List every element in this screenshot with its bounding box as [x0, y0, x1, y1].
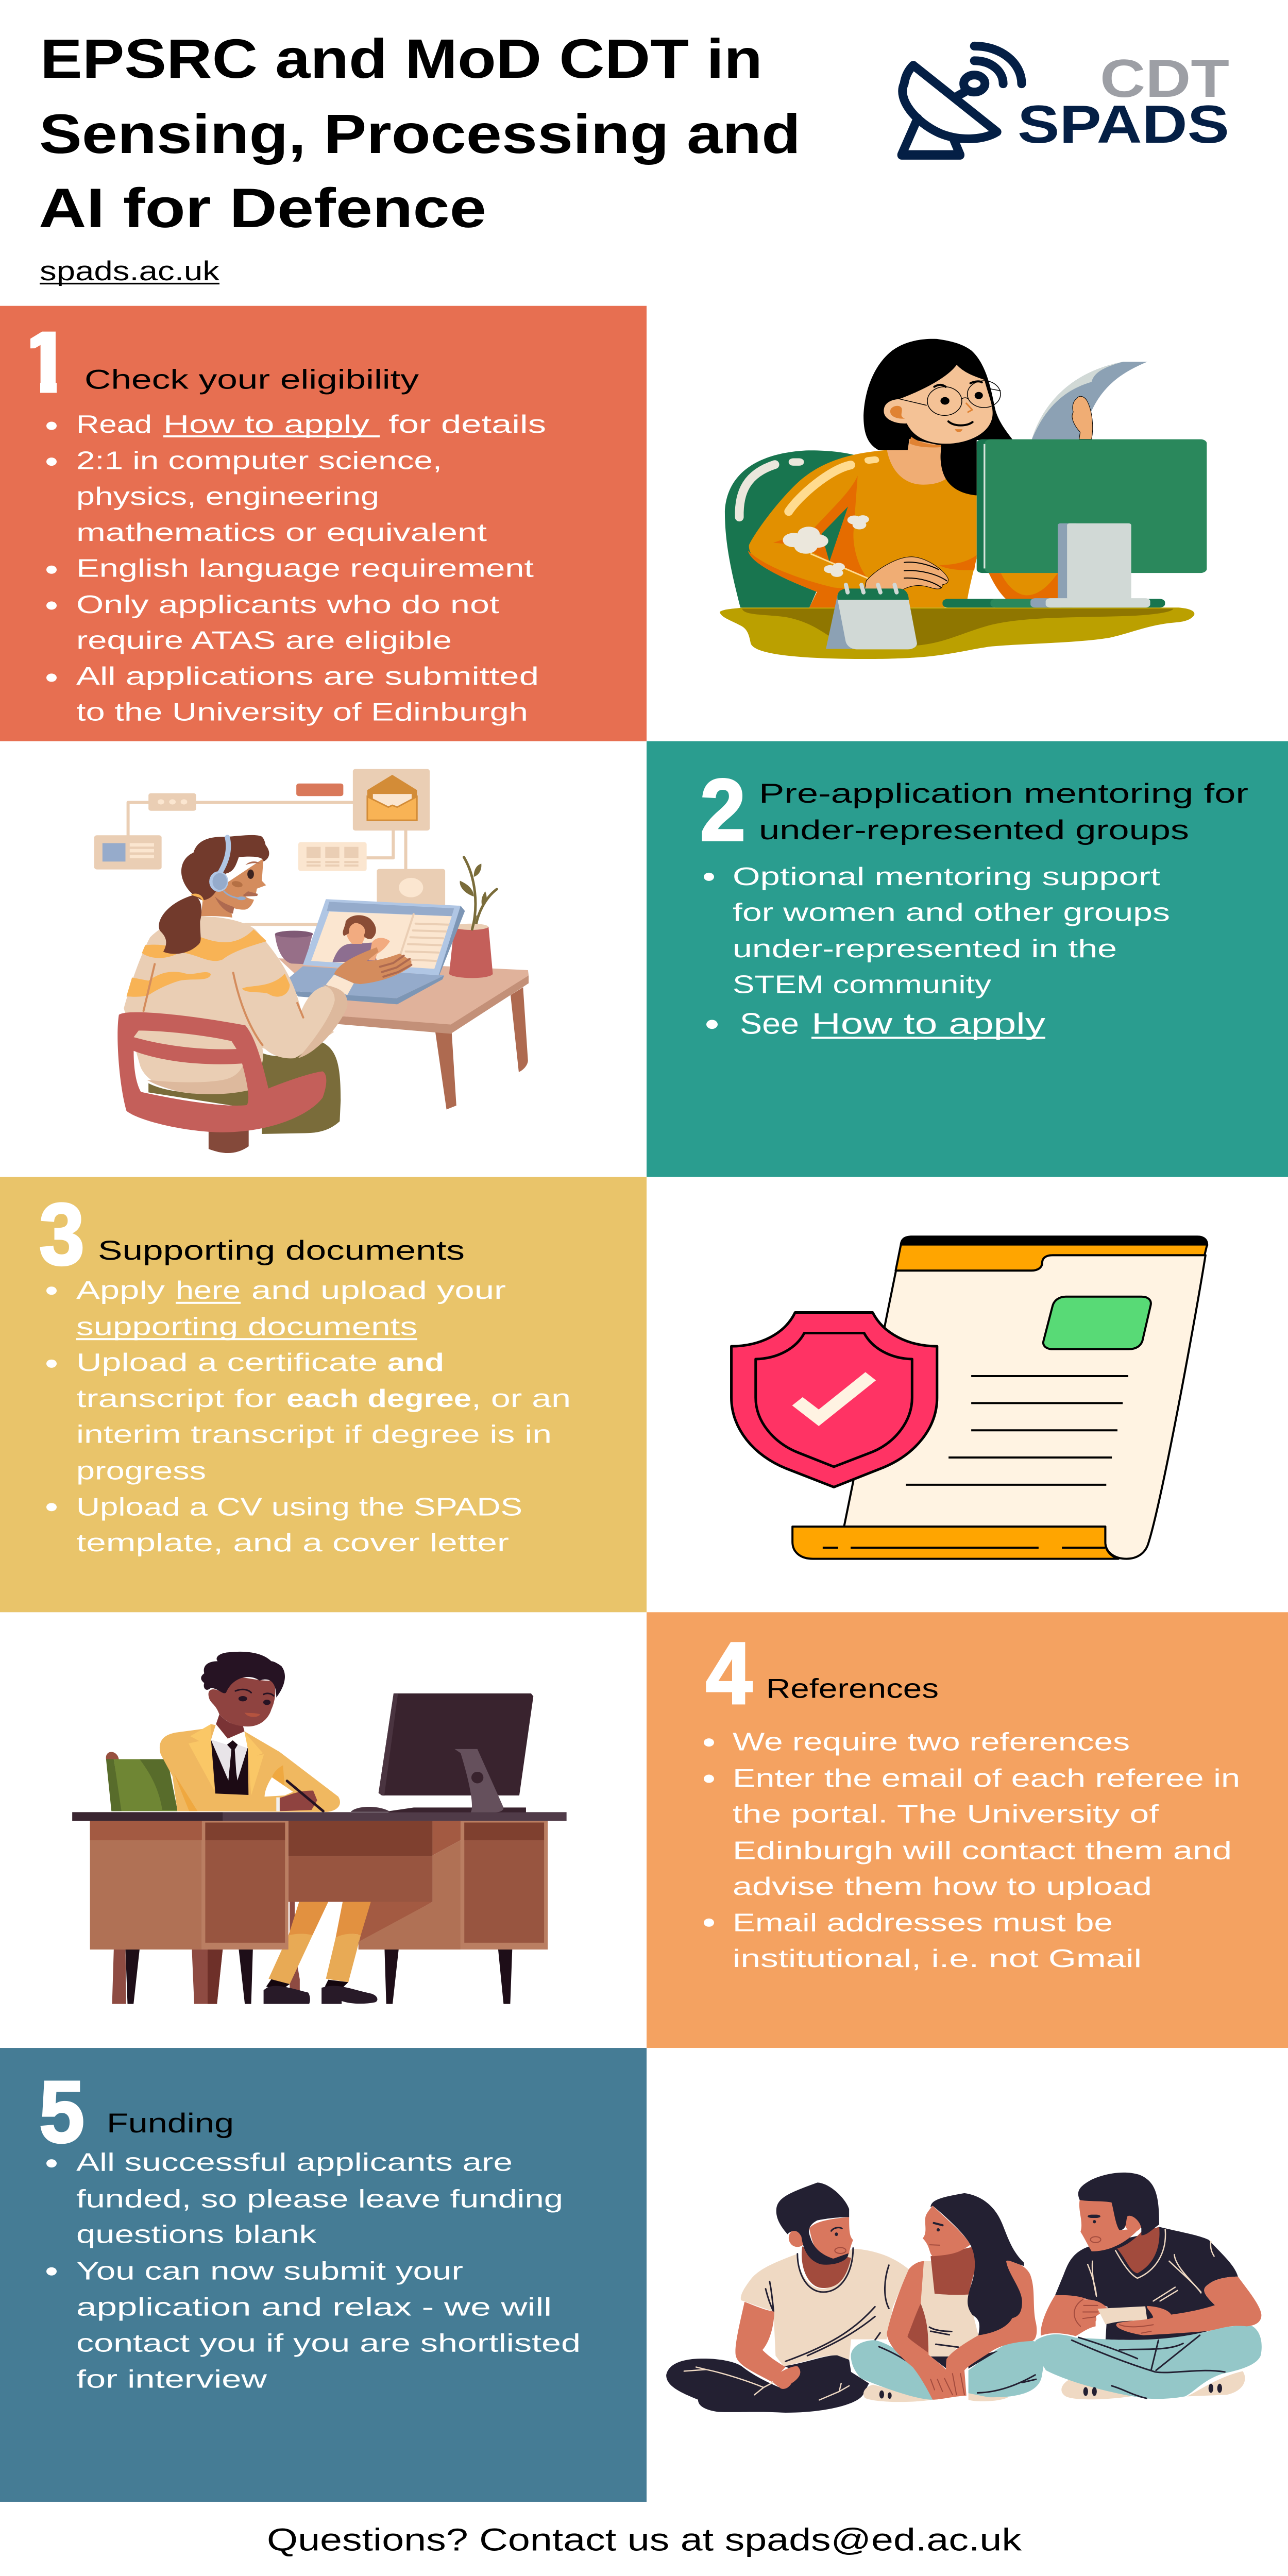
bullet list: STEM community: [733, 970, 991, 998]
bullet list: institutional, i.e. not Gmail: [733, 1944, 1142, 1973]
bullet list: Read: [76, 410, 152, 438]
bullet list: See: [740, 1007, 799, 1040]
bullet list: physics, engineering: [76, 482, 379, 511]
bullet list: English language requirement: [76, 553, 534, 582]
illustration: shield and document: [732, 1235, 1208, 1559]
bullet list: contact you if you are shortlisted: [76, 2329, 581, 2357]
bullet list: here: [176, 1276, 241, 1304]
number 3: 3: [39, 1185, 84, 1283]
heading: supporting documents: Supporting documents: [98, 1235, 465, 1266]
bullet list: Upload a certificate: [76, 1348, 378, 1377]
title: [39, 27, 801, 239]
bullet list: interim transcript if degree is in: [76, 1419, 552, 1448]
number 1: 1: [20, 314, 72, 412]
bullet list: transcript for: [76, 1384, 276, 1412]
illustration: man at desk: [72, 1652, 567, 2004]
bullet list: Only applicants who do not: [76, 590, 499, 618]
bullet list: supporting documents: [76, 1312, 417, 1341]
bullet list: each degree: [286, 1384, 471, 1412]
title: EPSRC and MoD CDT in: [40, 27, 762, 90]
heading: pre-application mentoring: under-represented groups: [759, 815, 1189, 845]
bullet list: 2:1 in computer science,: [76, 446, 442, 474]
bullet list: advise them how to upload: [733, 1872, 1152, 1901]
bullet list: , or an: [471, 1384, 571, 1412]
bullet list: application and relax - we will: [76, 2292, 552, 2321]
bullet list: Edinburgh will contact them and: [733, 1836, 1232, 1865]
bullet list: for women and other groups: [733, 897, 1170, 926]
logo: CDT SPADS: SPADS: [1018, 94, 1229, 154]
bullet list: mathematics or equivalent: [76, 518, 487, 546]
bullet list: for details: [388, 410, 546, 438]
number 4: 4: [706, 1624, 752, 1722]
title: Sensing, Processing and: [39, 103, 801, 165]
panel: step 1 eligibility: [0, 306, 647, 741]
logo: CDT SPADS: CDT: [1100, 48, 1229, 108]
panel: step 2 mentoring: [647, 741, 1288, 1177]
number 5: 5: [39, 2063, 84, 2161]
bullet list: [46, 410, 546, 726]
illustration: woman on video call: [94, 769, 529, 1153]
bullet list: We require two references: [733, 1727, 1130, 1756]
bullet list: [46, 2147, 581, 2393]
heading: funding: Funding: [107, 2108, 234, 2139]
bullet list: and upload your: [251, 1276, 506, 1304]
bullet list: Apply: [76, 1276, 165, 1304]
bullet list: the portal. The University of: [733, 1799, 1159, 1828]
bullet list: Upload a CV using the SPADS: [76, 1492, 522, 1521]
panel: step 5 funding: [0, 2048, 647, 2502]
heading: pre-application mentoring: [759, 778, 1248, 845]
illustration: woman at computer: [720, 339, 1207, 659]
bullet list: under-represented in the: [733, 934, 1117, 962]
bullet list: [704, 1727, 1240, 1973]
website link: spads.ac.uk: [40, 256, 219, 286]
bullet list: Enter the email of each referee in: [733, 1764, 1240, 1792]
bullet list: to the University of Edinburgh: [76, 698, 528, 726]
bullet list: require ATAS are eligible: [76, 625, 452, 654]
bullet list: template, and a cover letter: [76, 1528, 509, 1556]
heading: check your eligibility: Check your eligibility: [84, 364, 419, 395]
bullet list: [704, 862, 1170, 1040]
bullet list: How to apply: [163, 410, 369, 438]
bullet list: You can now submit your: [76, 2257, 463, 2285]
title: AI for Defence: [39, 177, 486, 239]
bullet list: Email addresses must be: [733, 1908, 1113, 1937]
illustration: three people sitting: [666, 2173, 1262, 2413]
bullet list: for interview: [76, 2364, 267, 2393]
bullet list: funded, so please leave funding: [76, 2184, 563, 2213]
bullet list: questions blank: [76, 2219, 317, 2248]
bullet list: [46, 1276, 571, 1556]
number 2: 2: [700, 761, 745, 859]
bullet list: All successful applicants are: [76, 2147, 513, 2176]
bullet list: progress: [76, 1456, 206, 1485]
heading: pre-application mentoring: Pre-application mentoring for: [759, 778, 1248, 808]
bullet list: How to apply: [811, 1007, 1045, 1040]
panel: step 3 supporting documents: [0, 1177, 647, 1612]
logo: CDT SPADS: [902, 46, 1229, 155]
heading: references: References: [766, 1673, 939, 1704]
bullet list: and: [387, 1348, 444, 1377]
bullet list: All applications are submitted: [76, 662, 539, 690]
bullet list: Optional mentoring support: [733, 862, 1160, 890]
panel: step 4 references: [647, 1612, 1288, 2048]
footer contact line: Questions? Contact us at spads@ed.ac.uk: [267, 2522, 1022, 2557]
